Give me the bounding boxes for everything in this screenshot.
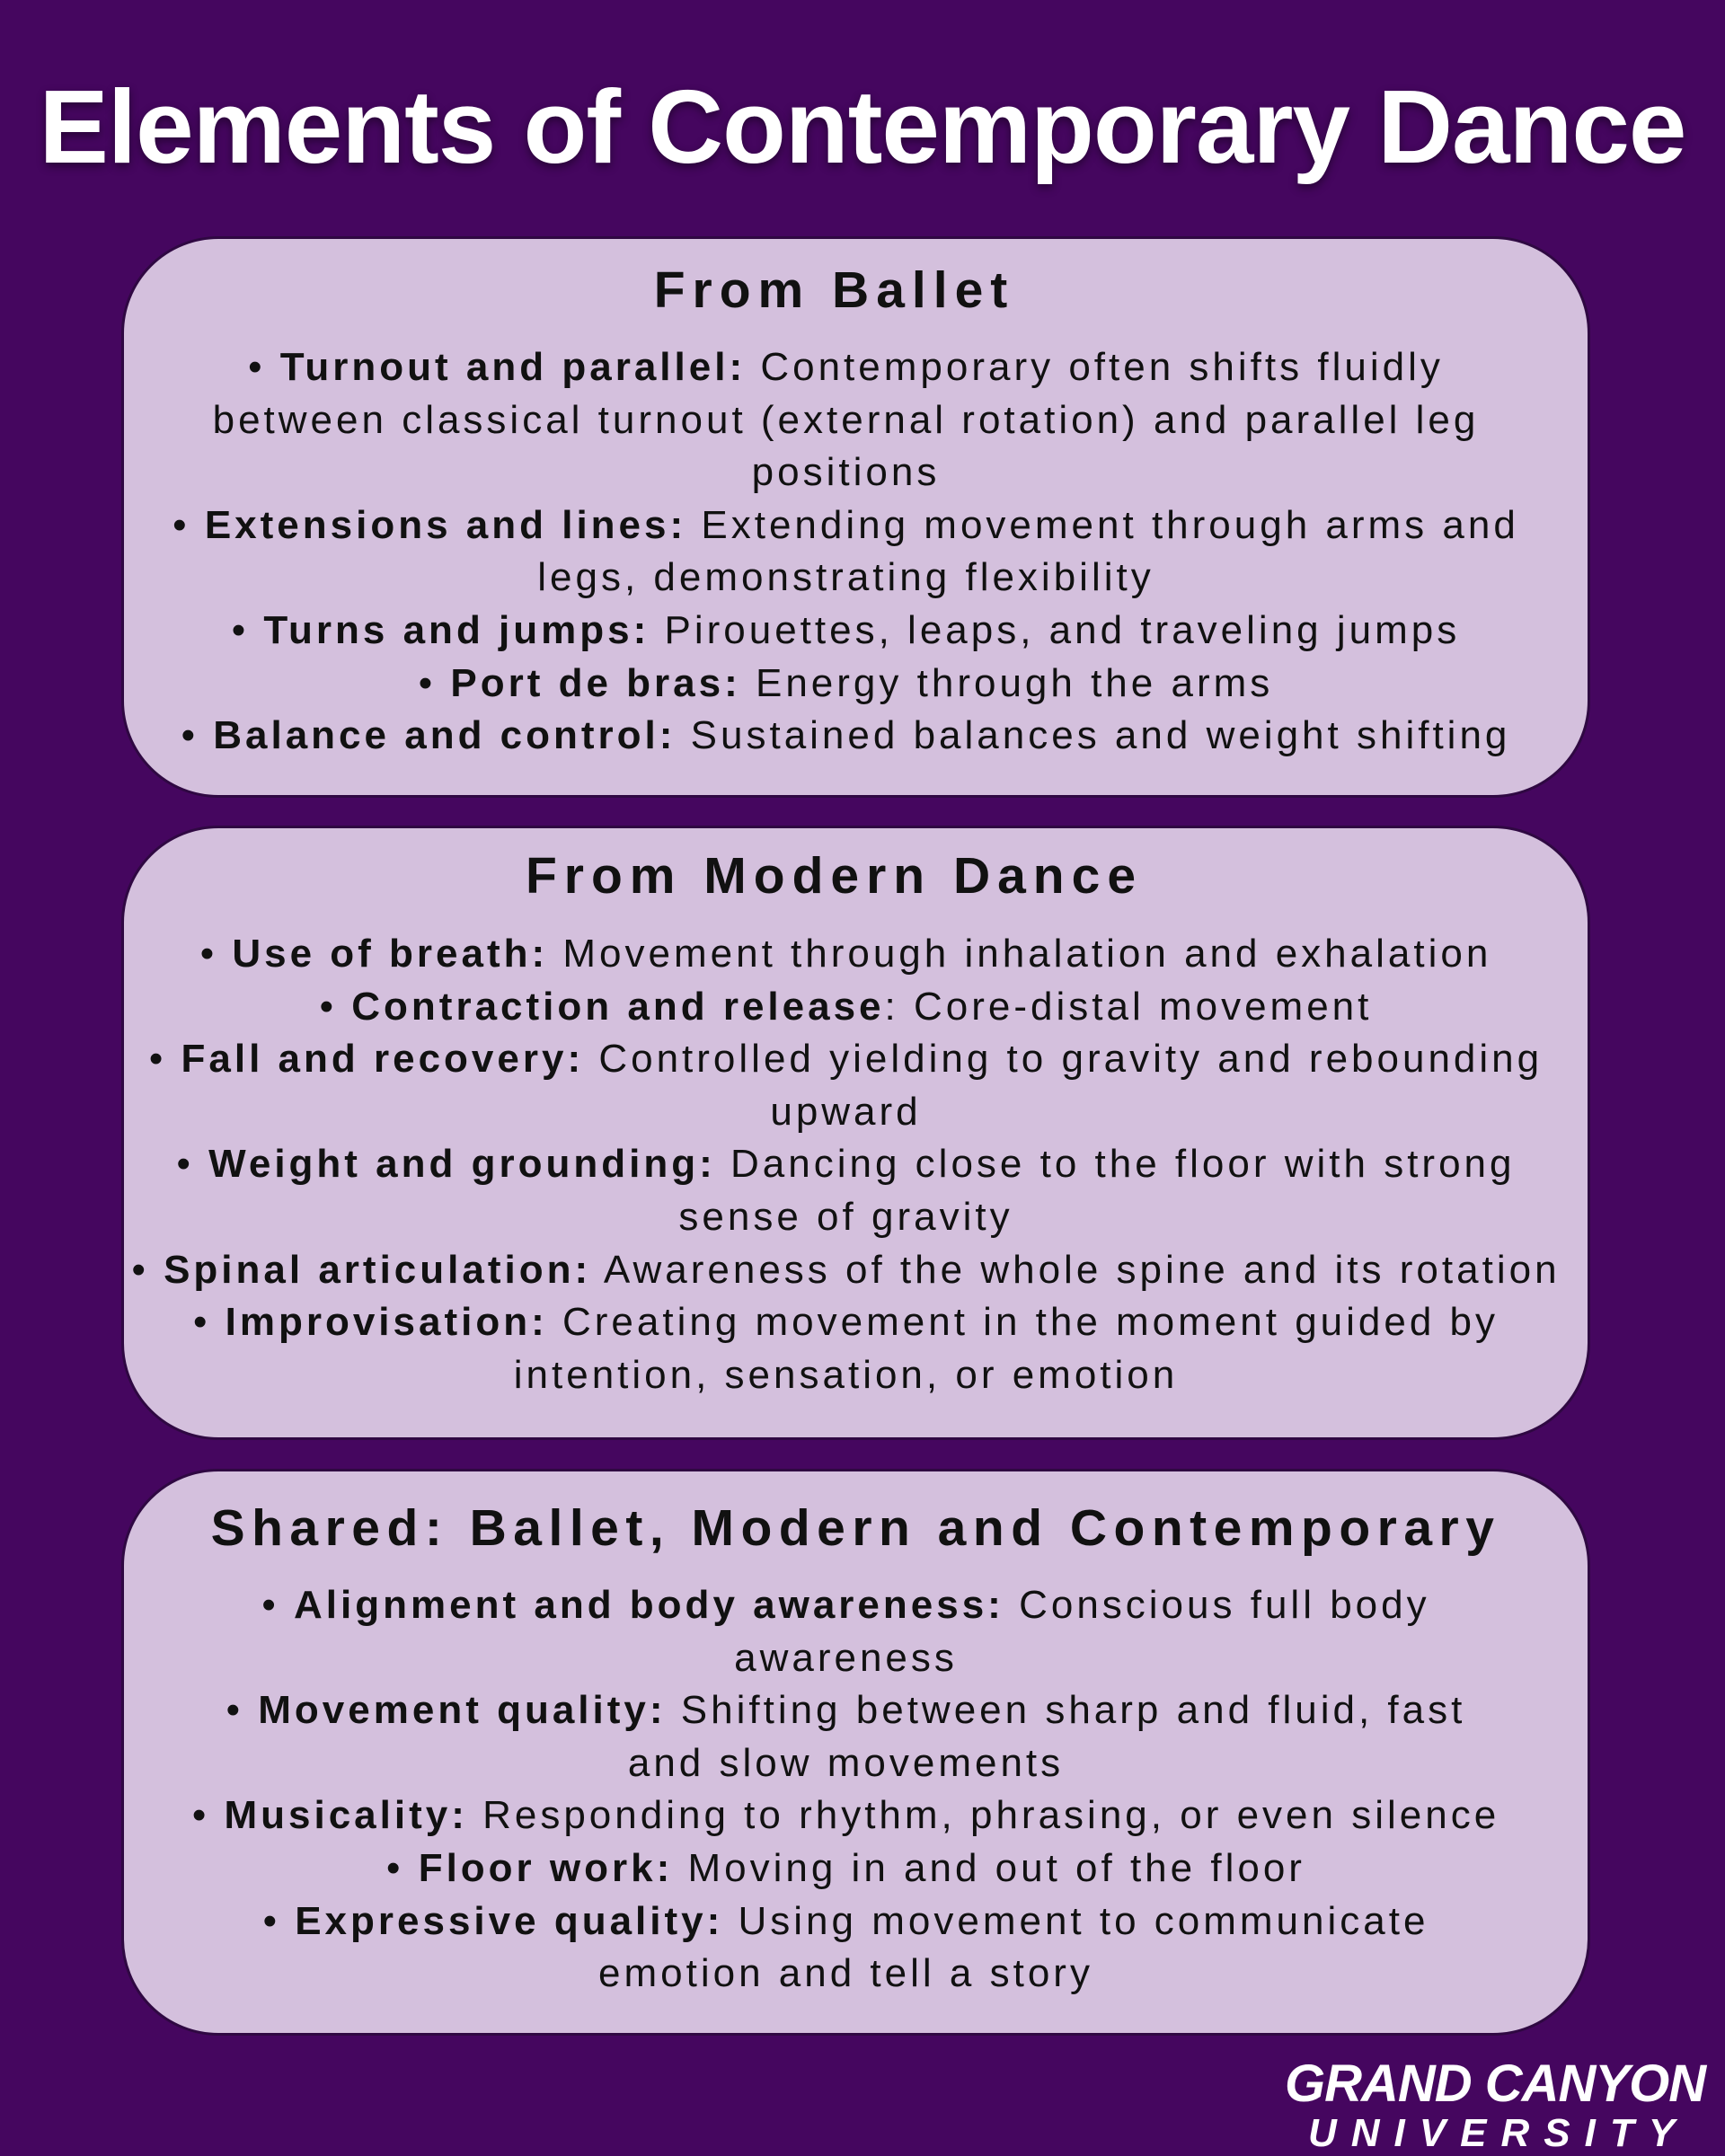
panel: from ballet (121, 236, 1590, 798)
text block: shared list: • Floor work: Moving in and out of the floor (386, 1846, 1305, 1890)
text block: modern list: • Weight and grounding: Dancing close to the floor with strong (176, 1142, 1515, 1186)
text block: ballet list: • Port de bras: Energy through the arms (419, 661, 1273, 705)
text block: shared list: • Expressive quality: Using movement to communicate (263, 1899, 1429, 1943)
text block: ballet list: between classical turnout (external rotation) and parallel leg (213, 398, 1479, 442)
text block: shared list: • Movement quality: Shifting between sharp and fluid, fast (226, 1688, 1465, 1732)
text block: modern list: • Use of breath: Movement through inhalation and exhalation (200, 932, 1491, 976)
text block: modern list: upward (770, 1090, 922, 1134)
text block: ballet list: • Turnout and parallel: Contemporary often shifts fluidly (248, 345, 1444, 389)
text block: modern list: • Spinal articulation: Awareness of the whole spine and its rotation (131, 1248, 1561, 1292)
heading: shared: Shared: Ballet, Modern and Contemporary (211, 1499, 1500, 1557)
heading: from modern dance: From Modern Dance (526, 847, 1143, 905)
text block: modern list: • Fall and recovery: Controlled yielding to gravity and rebounding (149, 1037, 1543, 1081)
panel: shared (121, 1469, 1590, 2036)
heading: from ballet: From Ballet (654, 261, 1014, 319)
text block: shared list: emotion and tell a story (598, 1951, 1093, 1995)
text block: modern list: intention, sensation, or emotion (514, 1353, 1178, 1397)
text block: shared list: and slow movements (628, 1741, 1064, 1785)
text block: shared list: • Musicality: Responding to rhythm, phrasing, or even silence (192, 1793, 1499, 1837)
logo: grand canyon university: UNIVERSITY (1308, 2111, 1689, 2155)
text block: shared list: • Alignment and body awareness: Conscious full body (261, 1583, 1430, 1627)
text block: modern list: • Improvisation: Creating movement in the moment guided by (193, 1300, 1499, 1344)
text block: modern list: • Contraction and release: Core-distal movement (320, 985, 1372, 1029)
logo: grand canyon university (1285, 2057, 1707, 2155)
text block: shared list: awareness (734, 1636, 958, 1680)
text block: ballet list: legs, demonstrating flexibility (537, 555, 1154, 599)
text block: ballet list: • Extensions and lines: Extending movement through arms and (172, 503, 1519, 547)
text block: ballet list: positions (752, 450, 940, 494)
text block: shared list (192, 1583, 1499, 1995)
text block: modern list: sense of gravity (678, 1195, 1013, 1239)
panel: from modern dance (121, 826, 1590, 1440)
text block: modern list (131, 932, 1561, 1397)
title: Elements of Contemporary Dance (40, 68, 1685, 185)
text block: ballet list (172, 345, 1519, 757)
text block: ballet list: • Balance and control: Sustained balances and weight shifting (181, 713, 1510, 757)
text block: ballet list: • Turns and jumps: Pirouettes, leaps, and traveling jumps (232, 608, 1460, 652)
